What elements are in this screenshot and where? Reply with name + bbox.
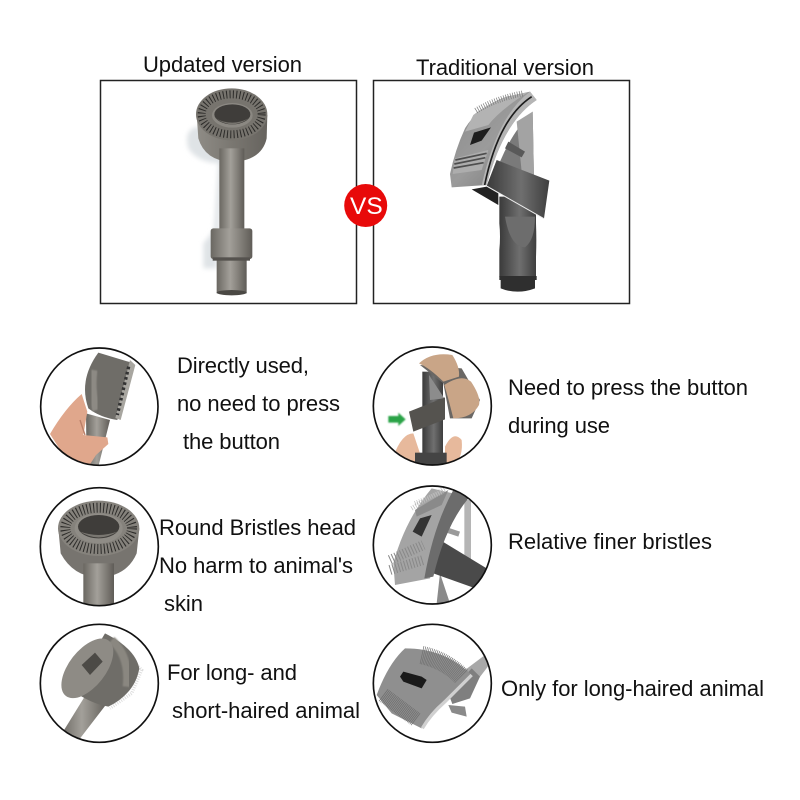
right column: traditional feature circles bbox=[372, 345, 493, 745]
text: directly used bbox=[177, 353, 340, 454]
icon: updated round-head tool bbox=[187, 88, 267, 295]
icon: VS badge: VS bbox=[350, 193, 383, 220]
icon: traditional grooming tool bbox=[450, 92, 549, 292]
icon: pressing the button bbox=[372, 345, 493, 468]
text: finer bristles: Relative finer bristles bbox=[508, 529, 712, 554]
text: directly used: the button bbox=[183, 429, 280, 454]
icon: round bristle head bbox=[40, 487, 160, 608]
text: press the button: during use bbox=[508, 413, 610, 438]
text: long haired only: Only for long-haired animal bbox=[501, 676, 764, 701]
text: directly used: no need to press bbox=[177, 391, 340, 416]
heading: traditional version: Traditional version bbox=[416, 55, 594, 80]
icon: hand holding tool bbox=[40, 347, 160, 467]
text: long and short haired bbox=[167, 660, 360, 723]
text: press the button: Need to press the button bbox=[508, 375, 748, 400]
text: long and short haired: For long- and bbox=[167, 660, 297, 685]
text: round bristles: skin bbox=[164, 591, 203, 616]
text: long and short haired: short-haired animal bbox=[172, 698, 360, 723]
panel: traditional version product bbox=[374, 80, 630, 304]
icon: head back view bbox=[40, 623, 160, 745]
icon: VS badge bbox=[344, 184, 387, 227]
text: directly used: Directly used, bbox=[177, 353, 309, 378]
icon: long-haired head top view bbox=[372, 623, 493, 745]
text: round bristles bbox=[159, 515, 356, 616]
panel: updated version product bbox=[100, 80, 356, 304]
left column: updated feature circles bbox=[40, 347, 160, 745]
text: round bristles: Round Bristles head bbox=[159, 515, 356, 540]
icon: fine bristles bbox=[372, 483, 493, 607]
text: round bristles: No harm to animal's bbox=[159, 553, 353, 578]
text: press the button bbox=[508, 375, 748, 438]
heading: updated version: Updated version bbox=[143, 52, 302, 77]
